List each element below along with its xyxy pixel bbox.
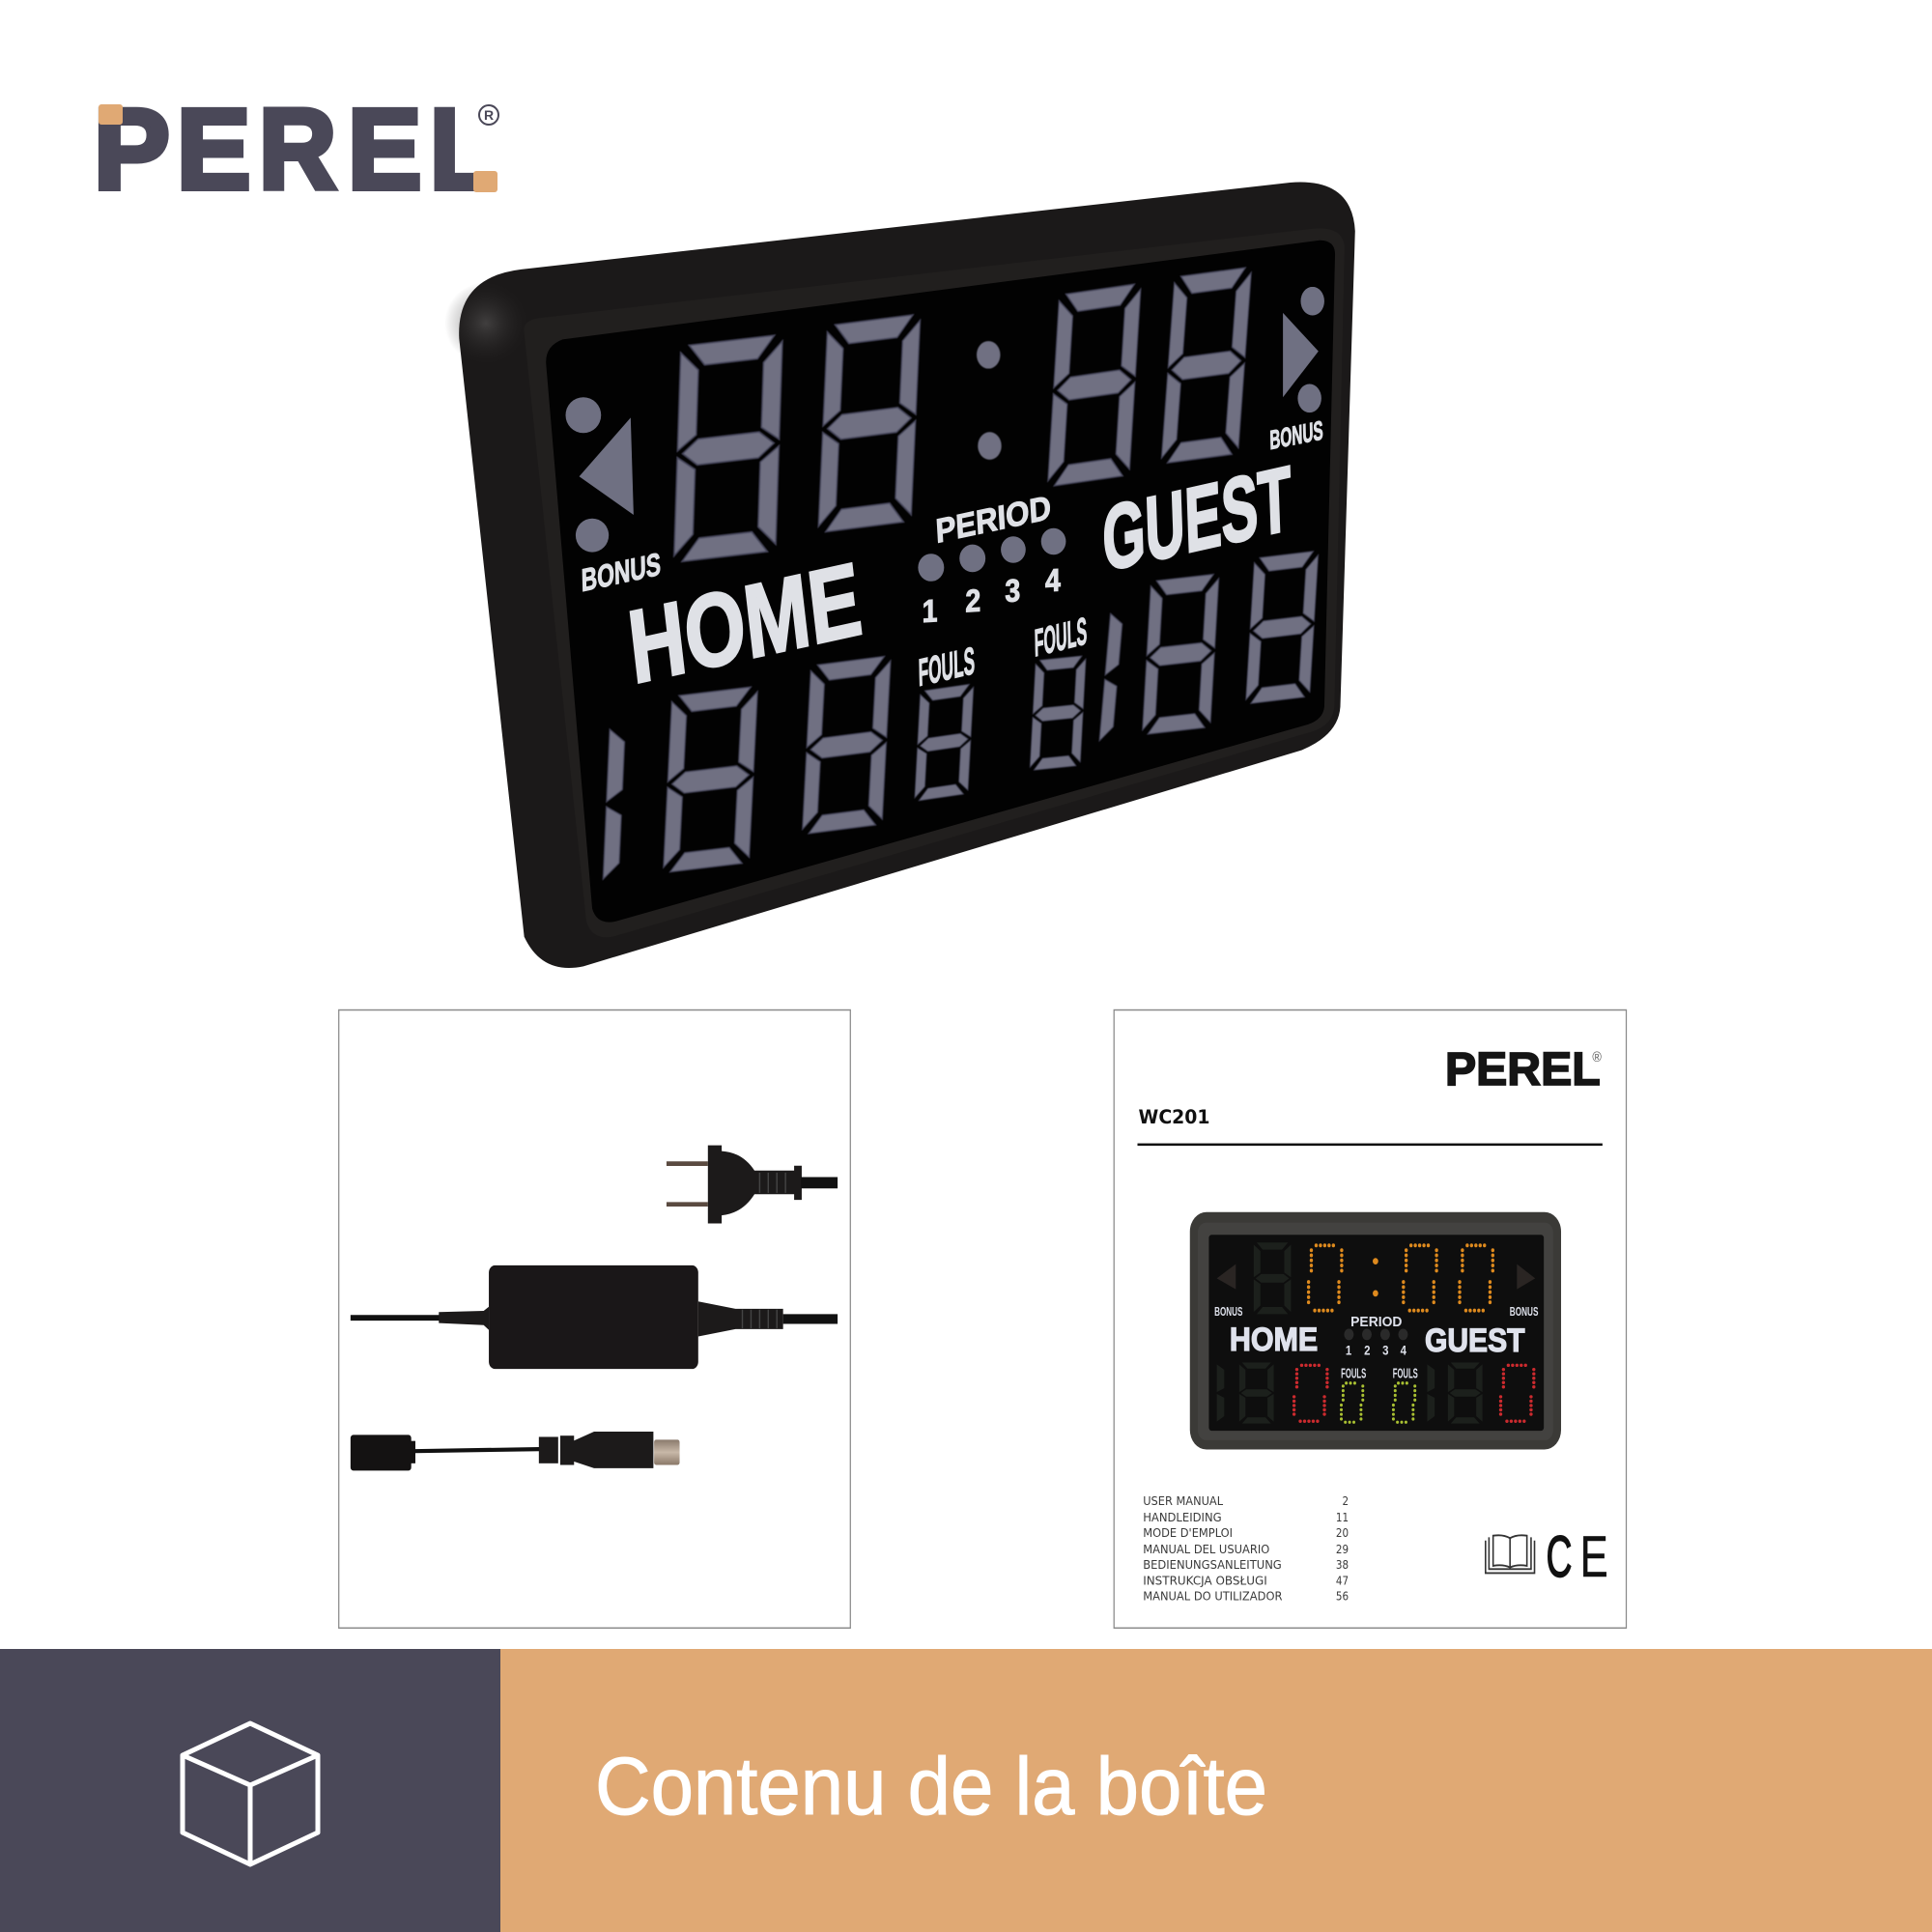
table of contents: 29 xyxy=(1336,1543,1349,1556)
manual logo: PEREL xyxy=(1445,1042,1601,1095)
small board labels: BONUS xyxy=(1214,1305,1243,1319)
rule xyxy=(1137,1144,1603,1146)
board labels: HOME xyxy=(623,541,867,706)
logo: PEREL: E xyxy=(348,85,421,213)
icon: open book xyxy=(1486,1535,1535,1573)
lit fouls digits xyxy=(1342,1383,1415,1422)
logo: PEREL: E xyxy=(177,85,250,213)
table of contents: HANDLEIDING xyxy=(1143,1511,1222,1524)
board labels: GUEST xyxy=(1101,446,1293,591)
EU plug xyxy=(667,1146,838,1223)
table of contents: 11 xyxy=(1336,1511,1349,1524)
small board labels: HOME xyxy=(1230,1321,1318,1357)
power adapter brick xyxy=(351,1265,838,1369)
logo: PEREL: P xyxy=(94,86,170,213)
board labels: 3 xyxy=(1005,572,1020,609)
panel frame xyxy=(339,1010,850,1628)
screen xyxy=(546,241,1335,923)
board labels: 2 xyxy=(965,582,980,619)
panel: power adapter and cables xyxy=(339,1010,850,1628)
footer: icon block xyxy=(0,1649,500,1932)
table of contents xyxy=(1143,1494,1349,1604)
lit score digits xyxy=(1294,1365,1534,1421)
body highlight xyxy=(444,282,527,364)
logo: PEREL xyxy=(94,85,498,213)
scoreboard body xyxy=(459,182,1355,968)
small scoreboard xyxy=(1190,1212,1561,1450)
scoreboard photo xyxy=(444,182,1355,968)
board labels: 4 xyxy=(1045,562,1061,599)
table of contents: 2 xyxy=(1342,1494,1349,1508)
small board labels: 4 xyxy=(1401,1344,1406,1358)
footer: title band xyxy=(500,1649,1932,1932)
small board labels: PERIOD xyxy=(1350,1313,1402,1329)
period lights xyxy=(1344,1329,1407,1340)
table of contents: MODE D'EMPLOI xyxy=(1143,1526,1233,1540)
small board labels: 3 xyxy=(1382,1344,1388,1358)
table of contents: 56 xyxy=(1336,1590,1349,1604)
logo: PEREL: L xyxy=(430,86,495,213)
manual logo: ® xyxy=(1592,1048,1602,1065)
period lights xyxy=(918,528,1065,582)
small board labels: 2 xyxy=(1364,1344,1371,1358)
bonus indicators xyxy=(566,287,1324,553)
title: Contenu de la boîte xyxy=(595,1741,1267,1832)
table of contents: MANUAL DEL USUARIO xyxy=(1143,1543,1269,1556)
table of contents: 38 xyxy=(1336,1558,1349,1572)
small board labels xyxy=(1214,1305,1539,1381)
board labels: BONUS xyxy=(581,547,661,599)
CE mark: C xyxy=(1547,1524,1572,1589)
score and fouls digits xyxy=(603,551,1319,879)
board labels: FOULS xyxy=(918,639,976,695)
small board labels: 1 xyxy=(1346,1344,1351,1358)
logo: PEREL: R xyxy=(484,107,494,123)
table of contents: BEDIENUNGSANLEITUNG xyxy=(1143,1558,1282,1572)
table of contents: INSTRUKCJA OBSŁUGI xyxy=(1143,1575,1267,1588)
panel: user manual cover xyxy=(1114,1010,1627,1628)
board labels: BONUS xyxy=(1269,415,1323,455)
table of contents: MANUAL DO UTILIZADOR xyxy=(1143,1590,1283,1604)
table of contents: 47 xyxy=(1336,1575,1349,1588)
unlit segments xyxy=(1217,1242,1535,1424)
small board labels: BONUS xyxy=(1510,1305,1539,1319)
table of contents: 20 xyxy=(1336,1526,1349,1540)
CE mark xyxy=(1547,1524,1608,1590)
logo: PEREL: R xyxy=(259,86,336,213)
small board labels: FOULS xyxy=(1341,1365,1366,1381)
bezel xyxy=(524,228,1345,937)
lit clock digits xyxy=(1309,1245,1492,1311)
small board labels: FOULS xyxy=(1393,1365,1418,1381)
small board labels: GUEST xyxy=(1425,1321,1525,1359)
board labels: FOULS xyxy=(1034,610,1088,666)
CE mark: E xyxy=(1580,1524,1608,1590)
DC lead and connector xyxy=(351,1432,680,1470)
board labels xyxy=(581,415,1323,706)
icon: box xyxy=(183,1723,318,1864)
clock digits xyxy=(674,267,1252,562)
table of contents: USER MANUAL xyxy=(1143,1494,1224,1508)
board labels: 1 xyxy=(923,592,937,630)
board labels: PERIOD xyxy=(935,489,1052,551)
panel frame xyxy=(1114,1010,1627,1628)
model number: WC201 xyxy=(1139,1107,1209,1128)
